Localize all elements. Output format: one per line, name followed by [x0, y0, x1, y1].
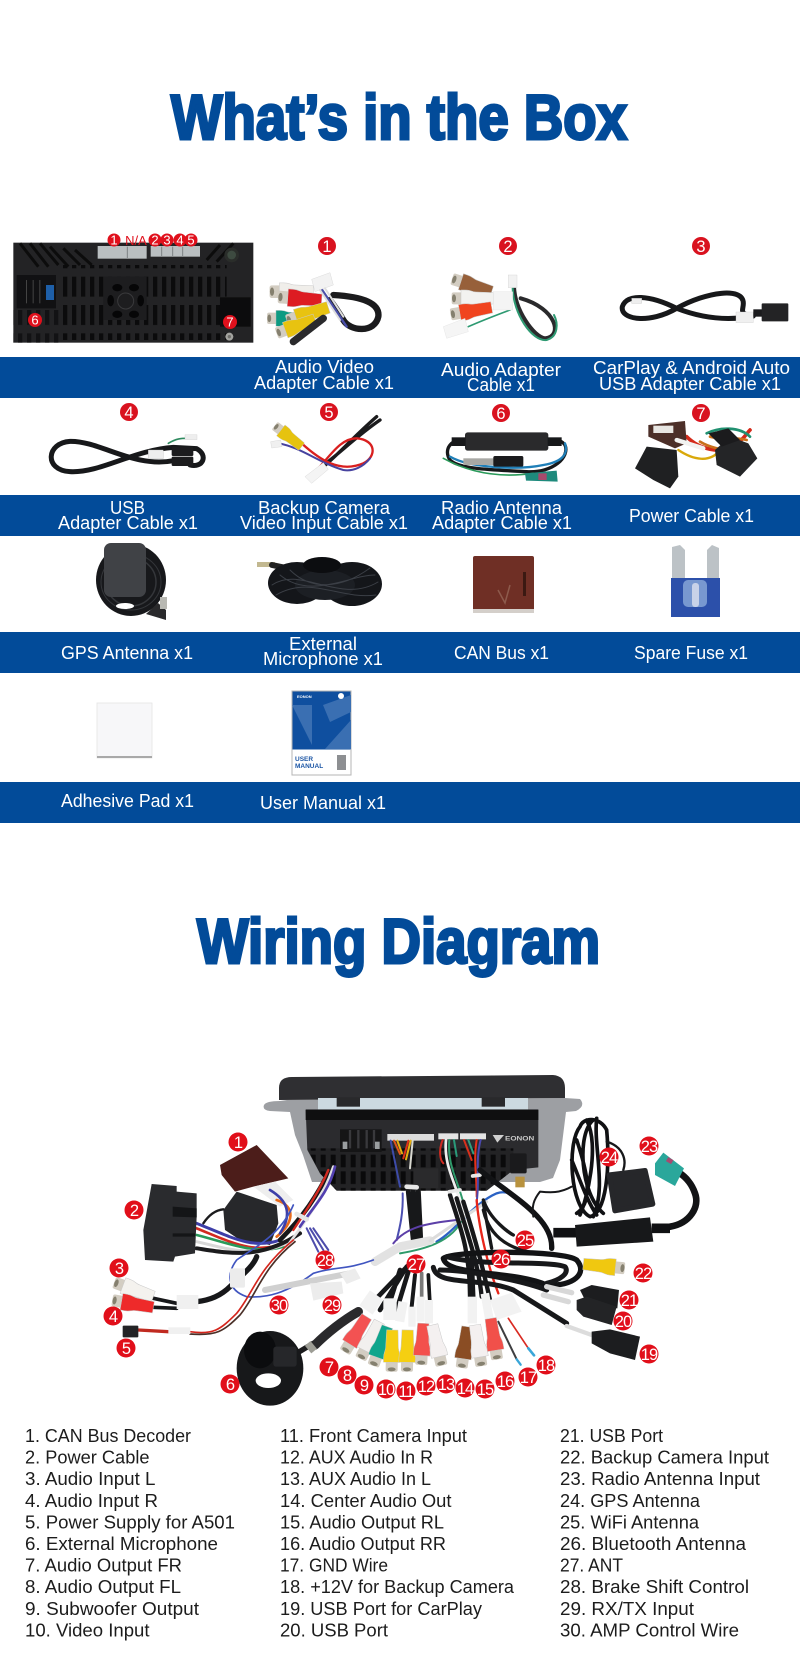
marker: cable 6: 6	[496, 405, 506, 423]
marker 23: 23	[641, 1138, 658, 1156]
marker: port 7: 7	[226, 314, 234, 330]
item: USB adapter cable	[51, 435, 203, 472]
marker: cable 2: 2	[503, 238, 513, 256]
marker 29: 29	[324, 1297, 341, 1315]
marker 1: 1	[234, 1134, 243, 1152]
marker 15: 15	[477, 1381, 494, 1399]
label: audio adapter cable: Audio Adapter	[441, 360, 561, 380]
legend column 2: 11. Front Camera Input	[280, 1426, 467, 1446]
legend column 2: 14. Center Audio Out	[280, 1491, 452, 1511]
marker: port 6	[28, 312, 42, 328]
legend column 3: 21. USB Port	[560, 1426, 663, 1446]
marker 9: 9	[360, 1377, 369, 1395]
marker: port 1: 1	[110, 232, 118, 248]
item: backup camera video input cable	[271, 417, 380, 483]
marker 19: 19	[641, 1346, 658, 1364]
label: radio antenna cable: Adapter Cable x1	[432, 513, 572, 533]
marker: port 5: 5	[187, 232, 195, 248]
marker: port 3: 3	[163, 232, 171, 248]
legend column 3: 28. Brake Shift Control	[560, 1577, 749, 1597]
port number markers on radio	[28, 232, 237, 330]
marker: cable 4	[120, 403, 138, 422]
band labels	[58, 357, 790, 813]
legend column 3: 27. ANT	[560, 1556, 623, 1576]
item: external microphone	[257, 557, 382, 606]
label: external microphone: Microphone x1	[263, 649, 383, 669]
label: user manual: User Manual x1	[260, 793, 386, 813]
marker: port 3	[160, 232, 174, 248]
legend column 1	[25, 1426, 235, 1640]
marker 22: 22	[635, 1265, 652, 1283]
blue label band 2	[0, 495, 800, 536]
marker: port 2: 2	[151, 232, 159, 248]
item: CarPlay and Android Auto USB cable	[622, 293, 788, 323]
legend column 1: 5. Power Supply for A501	[25, 1512, 235, 1532]
marker 3: 3	[115, 1260, 124, 1278]
RCA connectors row	[338, 1312, 505, 1372]
legend column 2: 17. GND Wire	[280, 1556, 388, 1576]
legend column 3: 23. Radio Antenna Input	[560, 1469, 760, 1489]
legend column 2: 18. +12V for Backup Camera	[280, 1577, 515, 1597]
marker: cable 3	[692, 237, 710, 256]
item: user manual: USER	[295, 756, 313, 763]
item: power cable	[635, 421, 757, 488]
marker 2: 2	[130, 1202, 139, 1220]
legend column 1: 3. Audio Input L	[25, 1469, 156, 1489]
marker 1	[228, 1132, 248, 1152]
legend column 1: 10. Video Input	[25, 1620, 150, 1640]
marker 6: 6	[226, 1376, 235, 1394]
right side: antennas, USB and video cables	[433, 1118, 696, 1360]
legend column 3	[560, 1426, 769, 1640]
marker 5	[116, 1338, 136, 1358]
legend column 2: 19. USB Port for CarPlay	[280, 1599, 482, 1619]
label: CarPlay and Android Auto cable	[593, 358, 790, 394]
photo: radio rear panel with port numbers	[13, 243, 253, 343]
marker: cable 1	[318, 237, 336, 256]
marker 30: 30	[271, 1297, 288, 1315]
legend column 1: 4. Audio Input R	[25, 1491, 158, 1511]
label: audio adapter cable	[441, 360, 561, 395]
legend column 2: 16. Audio Output RR	[280, 1534, 446, 1554]
legend column 1: 8. Audio Output FL	[25, 1577, 181, 1597]
legend column 2: 13. AUX Audio In L	[280, 1469, 431, 1489]
marker: port 7	[223, 314, 237, 330]
marker 24: 24	[601, 1149, 618, 1167]
marker 12: 12	[418, 1378, 435, 1396]
marker 21: 21	[621, 1292, 638, 1310]
marker 28: 28	[317, 1252, 334, 1270]
marker 18: 18	[538, 1357, 555, 1375]
legend column 3: 22. Backup Camera Input	[560, 1448, 769, 1468]
item: audio adapter cable	[443, 271, 557, 340]
label: spare fuse: Spare Fuse x1	[634, 643, 748, 663]
legend column 2: 15. Audio Output RL	[280, 1512, 444, 1532]
label: USB adapter cable: USB	[110, 498, 145, 518]
center cable harness	[372, 1175, 534, 1365]
label: CarPlay and Android Auto cable: CarPlay & Android Auto	[593, 358, 790, 378]
title: What's in the Box: What’s in the Box	[171, 83, 627, 153]
legend column 1: 1. CAN Bus Decoder	[25, 1426, 191, 1446]
marker 26: 26	[493, 1251, 510, 1269]
legend column 2: 12. AUX Audio In R	[280, 1448, 433, 1468]
label: CarPlay and Android Auto cable: USB Adapter Cable x1	[599, 374, 781, 394]
item: audio video adapter cable	[267, 273, 378, 342]
label: audio video adapter cable	[254, 357, 394, 393]
marker: cable 6	[492, 404, 510, 423]
blue label band 1	[0, 357, 800, 398]
marker 17: 17	[520, 1369, 537, 1387]
label: audio video adapter cable: Audio Video	[275, 357, 374, 377]
legend column 1: 2. Power Cable	[25, 1448, 150, 1468]
legend column 1: 6. External Microphone	[25, 1534, 218, 1554]
label: backup camera cable: Backup Camera	[258, 498, 391, 518]
label: GPS antenna: GPS Antenna x1	[61, 643, 193, 663]
label: CAN bus: CAN Bus x1	[454, 643, 549, 663]
marker: cable 5: 5	[324, 404, 334, 422]
marker 4: 4	[109, 1308, 118, 1326]
marker 2	[124, 1200, 144, 1220]
marker: port 6: 6	[31, 312, 39, 328]
marker 4	[104, 1306, 122, 1326]
marker: port 5	[184, 232, 198, 248]
head unit body: EONON	[505, 1136, 535, 1143]
marker 27: 27	[408, 1256, 425, 1274]
marker 25: 25	[517, 1232, 534, 1250]
marker: cable 7: 7	[696, 405, 706, 423]
legend column 1: 9. Subwoofer Output	[25, 1599, 199, 1619]
legend column 3: 30. AMP Control Wire	[560, 1620, 739, 1640]
marker 10: 10	[378, 1381, 395, 1399]
item: user manual: EONON	[297, 694, 312, 699]
marker 20: 20	[615, 1313, 632, 1331]
item: user manual	[292, 691, 351, 775]
label: backup camera cable: Video Input Cable x1	[240, 513, 408, 533]
legend column 3: 26. Bluetooth Antenna	[560, 1534, 747, 1554]
label: power cable: Power Cable x1	[629, 506, 754, 526]
connector labels on cables	[359, 1290, 522, 1327]
item: CAN bus box	[473, 556, 534, 613]
item: adhesive pad	[97, 703, 152, 758]
left side: decoder, power harness, audio inputs, microphone	[111, 1145, 373, 1406]
head unit body	[264, 1075, 582, 1213]
label: audio adapter cable: Cable x1	[467, 375, 535, 395]
marker: N/A: N/A	[125, 233, 147, 248]
label: USB adapter cable	[58, 498, 198, 533]
marker 11: 11	[398, 1383, 414, 1401]
label: radio antenna cable	[432, 498, 572, 533]
marker: port 4: 4	[176, 232, 184, 248]
marker 5: 5	[122, 1340, 131, 1358]
marker 9	[354, 1376, 374, 1395]
legend column 2: 20. USB Port	[280, 1620, 388, 1640]
label: radio antenna cable: Radio Antenna	[441, 498, 563, 518]
marker: cable 3: 3	[696, 238, 706, 256]
label: external microphone: External	[289, 634, 357, 654]
marker: port 1	[108, 232, 120, 248]
marker: port 2	[148, 232, 162, 248]
marker 14: 14	[457, 1380, 474, 1398]
marker 8: 8	[343, 1367, 352, 1385]
marker 3	[110, 1258, 128, 1278]
marker: cable 4: 4	[124, 404, 134, 422]
label: adhesive pad: Adhesive Pad x1	[61, 791, 194, 811]
legend column 2	[280, 1426, 515, 1640]
label: external microphone	[263, 634, 383, 669]
chart: wiring diagram photo	[111, 1075, 696, 1406]
marker: cable 2	[499, 237, 517, 256]
marker: cable 5	[320, 403, 338, 422]
marker 6	[220, 1374, 240, 1394]
label: USB adapter cable: Adapter Cable x1	[58, 513, 198, 533]
marker 7: 7	[325, 1359, 334, 1377]
marker 8	[338, 1366, 356, 1385]
legend column 3: 25. WiFi Antenna	[560, 1512, 700, 1532]
item: user manual: MANUAL	[295, 763, 323, 770]
marker 16: 16	[497, 1373, 514, 1391]
blue label band 4	[0, 782, 800, 823]
label: audio video adapter cable: Adapter Cable x1	[254, 373, 394, 393]
item: spare fuse	[671, 545, 720, 617]
legend column 1: 7. Audio Output FR	[25, 1556, 182, 1576]
number markers for item photos	[120, 237, 710, 423]
marker: cable 7	[692, 404, 710, 423]
item: radio antenna adapter cable	[443, 432, 566, 482]
label: backup camera cable	[240, 498, 408, 533]
marker 13: 13	[438, 1376, 455, 1394]
legend column 3: 24. GPS Antenna	[560, 1491, 701, 1511]
marker 7	[320, 1358, 338, 1377]
title: Wiring Diagram: Wiring Diagram	[197, 907, 600, 977]
marker: port 4	[174, 232, 186, 248]
blue label band 3	[0, 632, 800, 673]
item: GPS antenna	[96, 543, 167, 620]
legend column 3: 29. RX/TX Input	[560, 1599, 694, 1619]
wiring diagram number markers	[104, 1132, 658, 1401]
marker: cable 1: 1	[322, 238, 332, 256]
